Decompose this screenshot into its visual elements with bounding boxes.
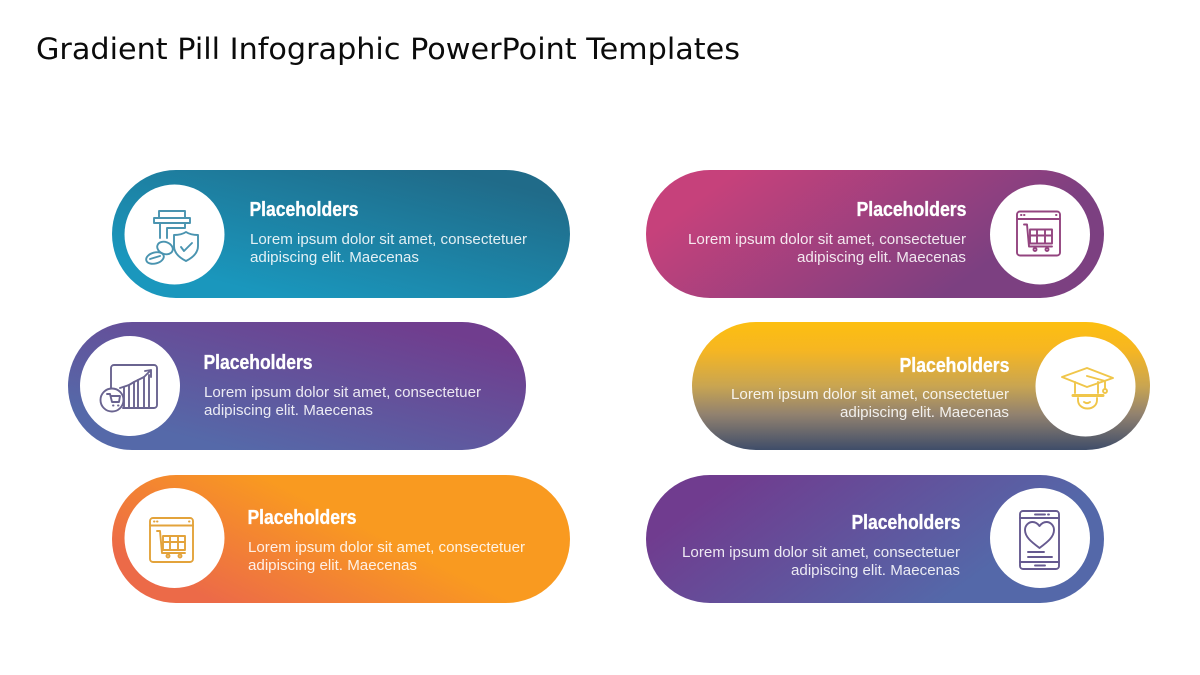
icon circle (80, 336, 180, 436)
panel: purple pill (68, 322, 526, 450)
heading: Placeholders (250, 199, 358, 221)
body text: Lorem ipsum dolor sit amet, consectetuer (250, 231, 527, 248)
icon circle (990, 184, 1090, 284)
heading: Placeholders (248, 507, 356, 529)
body text: Lorem ipsum dolor sit amet, consectetuer (682, 544, 960, 561)
heading: Placeholders (856, 199, 966, 221)
icon circle (124, 184, 224, 284)
pill background (112, 170, 570, 298)
body text: Lorem ipsum dolor sit amet, consectetuer (248, 539, 525, 556)
icon: phone with heart (1020, 511, 1059, 569)
body text: adipiscing elit. Maecenas (204, 402, 373, 419)
icon: growth chart with cart (100, 365, 157, 412)
body text: adipiscing elit. Maecenas (248, 557, 417, 574)
icon: web shopping cart (1017, 212, 1060, 256)
pill background (646, 475, 1104, 603)
panel: yellow to slate pill (692, 322, 1150, 450)
icon circle (990, 488, 1090, 588)
pill background (112, 475, 570, 603)
pill background (646, 170, 1104, 298)
panel: teal pill (112, 170, 570, 298)
panel: orange pill (112, 475, 570, 603)
body text: Lorem ipsum dolor sit amet, consectetuer (204, 384, 481, 401)
panel: magenta pill (646, 170, 1104, 298)
body text: adipiscing elit. Maecenas (797, 249, 966, 266)
heading: Placeholders (852, 512, 960, 534)
body text: Lorem ipsum dolor sit amet, consectetuer (731, 386, 1009, 403)
body text: adipiscing elit. Maecenas (791, 562, 960, 579)
body text: adipiscing elit. Maecenas (250, 249, 419, 266)
icon: graduate with cap (1062, 368, 1113, 408)
heading: Placeholders (204, 352, 312, 374)
icon: web shopping cart (150, 518, 193, 562)
body text: Lorem ipsum dolor sit amet, consectetuer (688, 231, 966, 248)
icon: press, pills and shield (145, 211, 198, 266)
icon circle (1036, 336, 1136, 436)
icon circle (124, 488, 224, 588)
heading: Placeholders (900, 355, 1010, 377)
pill background (68, 322, 526, 450)
panel: violet pill (646, 475, 1104, 603)
pill background (692, 322, 1150, 450)
title: Gradient Pill Infographic PowerPoint Templates (36, 32, 740, 66)
body text: adipiscing elit. Maecenas (840, 404, 1009, 421)
